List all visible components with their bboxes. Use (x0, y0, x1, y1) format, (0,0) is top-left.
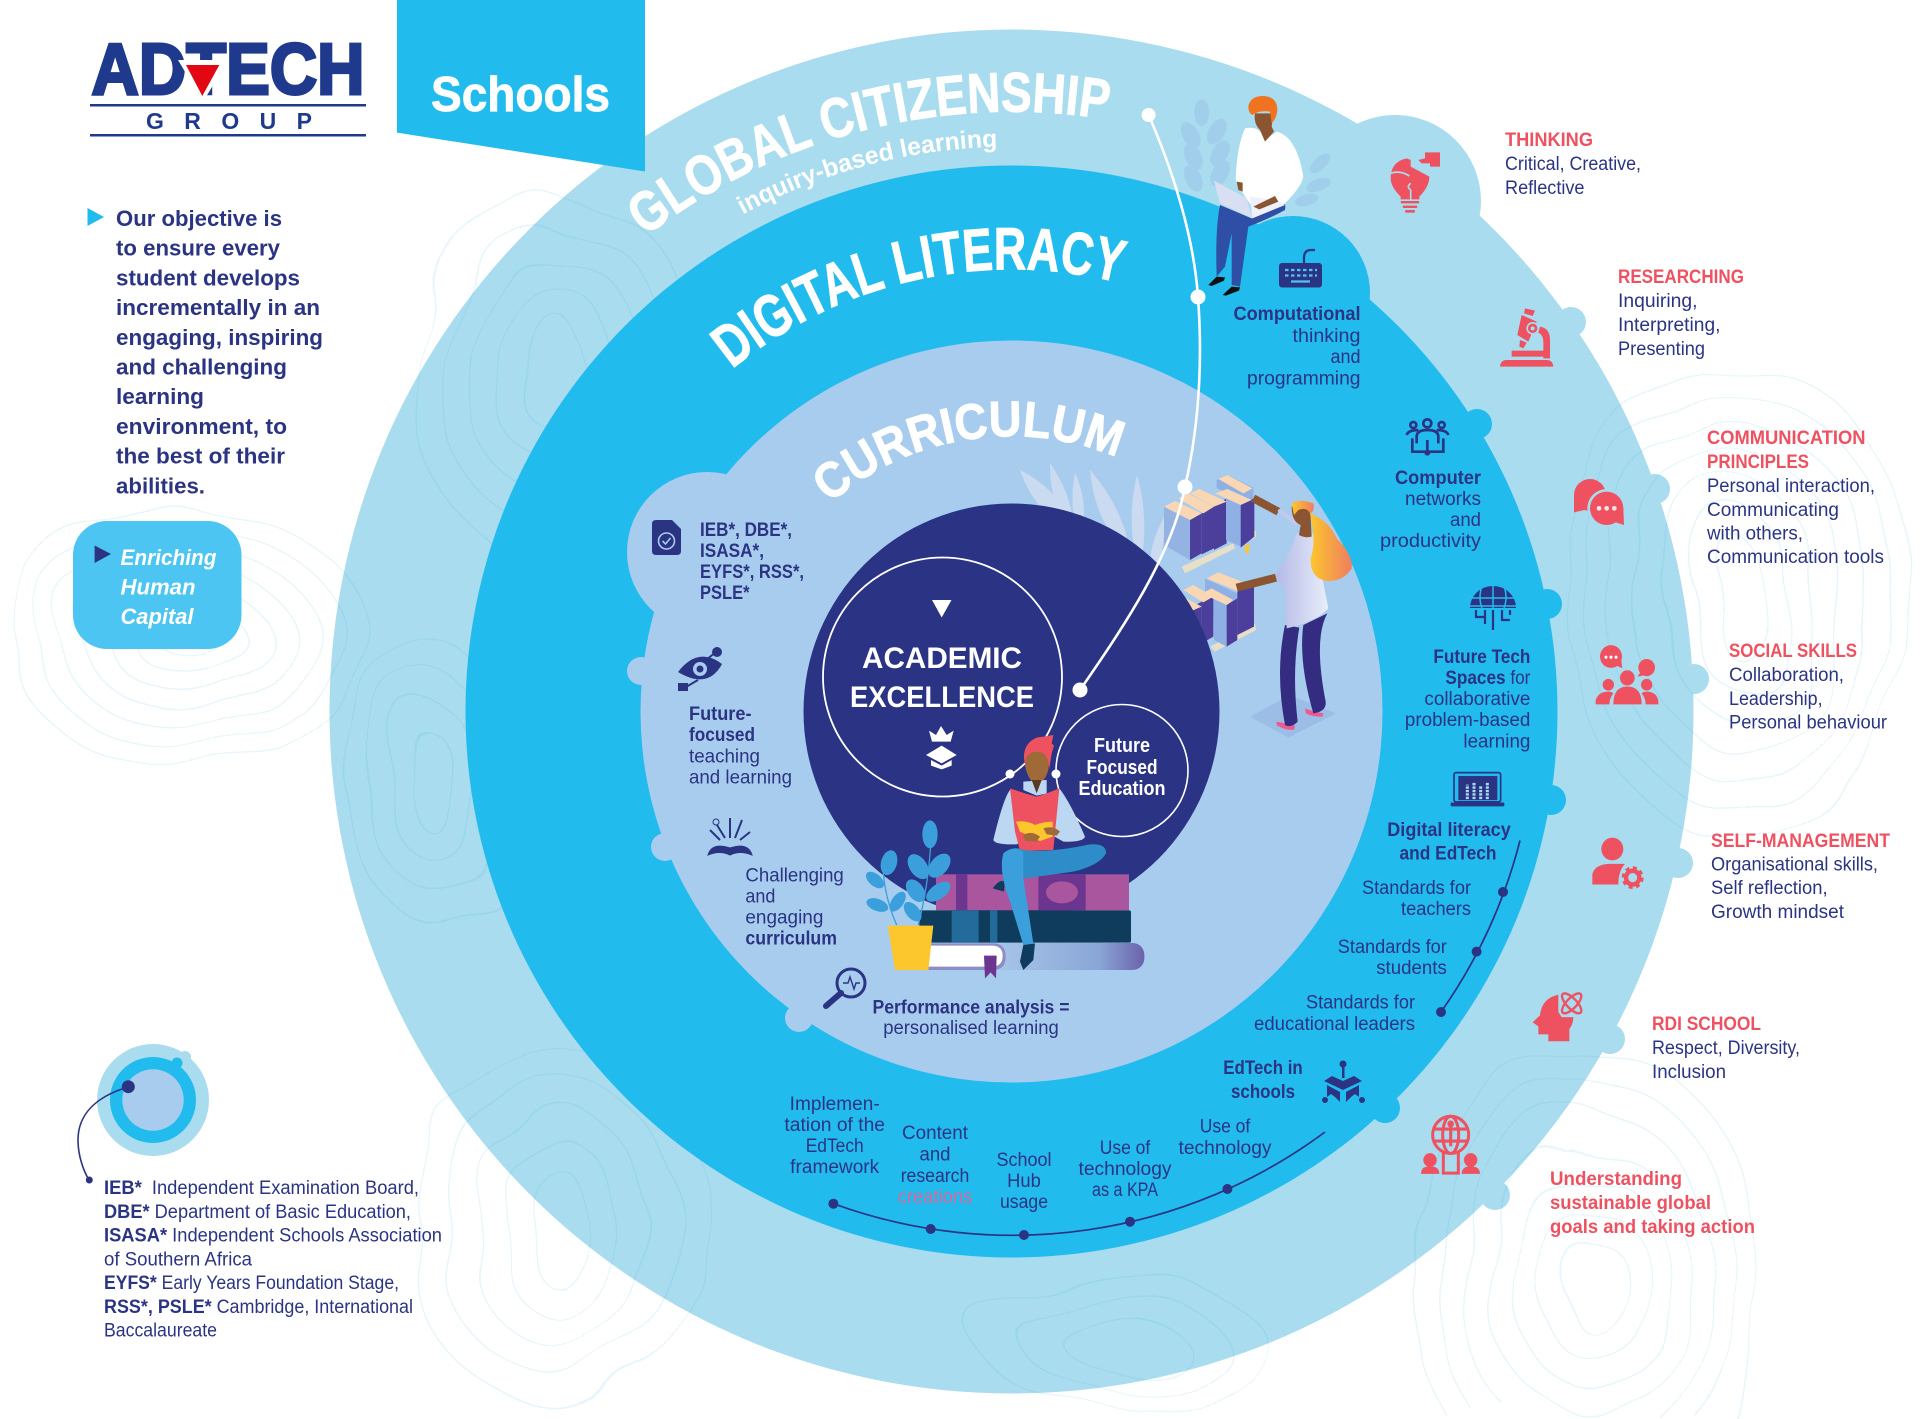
illustration: woman reaching for books (1237, 498, 1352, 738)
block: communication principles: with others, (1706, 524, 1803, 544)
objective statement: environment, to (116, 414, 287, 439)
curved subtitle: inquiry-based learning: inquiry-based learning (736, 130, 996, 214)
illustration: man with laptop (1177, 96, 1333, 296)
block: computational thinking with keyboard icon: programming (1247, 368, 1360, 390)
objective statement: to ensure every (116, 236, 280, 261)
block: computational thinking with keyboard icon: thinking (1292, 326, 1360, 347)
flag: Schools: Schools (431, 68, 610, 122)
block: challenging curriculum with book icon (708, 818, 844, 950)
block: researching (1618, 267, 1744, 360)
legend: abbreviations: IEB* Independent Examination Board, (104, 1178, 419, 1199)
label: implementation of the framework: Implemen- (790, 1094, 880, 1115)
block: researching: Interpreting, (1618, 315, 1720, 336)
block: EdTech in schools (1223, 1058, 1365, 1103)
arms (1237, 498, 1278, 588)
label: school hub usage: usage (1000, 1192, 1048, 1213)
block: communication principles: Communication tools (1707, 547, 1884, 568)
curved title: digital literacy: DIGITAL LITERACY (708, 228, 1129, 368)
block: social skills: SOCIAL SKILLS (1729, 641, 1857, 662)
body (1275, 533, 1328, 628)
label: implementation of the framework: framework (790, 1157, 880, 1178)
label: use of technology (1178, 1117, 1272, 1159)
books: lower row (1170, 572, 1254, 650)
objective statement: learning (116, 384, 204, 409)
objective statement: and challenging (116, 354, 287, 380)
panel: outer ring global citizenship (330, 30, 1709, 1394)
block: performance analysis with magnifier icon (826, 969, 1070, 1039)
block: self-management (1711, 831, 1890, 923)
icon: triangle (932, 600, 952, 618)
block: self-management: Growth mindset (1711, 902, 1845, 923)
block: future-focused teaching with eye icon (678, 647, 792, 789)
block: researching: RESEARCHING (1618, 267, 1744, 288)
illustration: pale leaves behind centre circle (1020, 463, 1165, 590)
block: communication principles: COMMUNICATION (1707, 428, 1866, 449)
legs (1280, 613, 1327, 726)
icon: group of people with speech bubbles (1596, 645, 1658, 704)
block: curriculum bodies with document icon: IEB*, DBE*, (700, 520, 792, 541)
block: sustainable goals: sustainable global (1550, 1193, 1711, 1214)
books (919, 874, 1144, 978)
legend: abbreviations: of Southern Africa (104, 1250, 252, 1271)
timeline: standards (1436, 840, 1520, 1017)
hair (1248, 96, 1277, 123)
hair (1292, 501, 1314, 515)
label: use of technology as a KPA (1078, 1138, 1172, 1201)
callout: enriching human capital: Enriching (120, 545, 217, 570)
block: digital literacy and EdTech standards: students (1376, 958, 1447, 979)
block: EdTech in schools: schools (1231, 1082, 1295, 1103)
block: EdTech in schools: EdTech in (1223, 1058, 1303, 1079)
shirt (1236, 128, 1303, 208)
icon: document (652, 520, 681, 555)
block: curriculum bodies with document icon: PSLE* (700, 583, 750, 604)
icon: eye (678, 647, 722, 691)
block: curriculum bodies with document icon (652, 520, 804, 604)
objective statement: abilities. (116, 473, 205, 498)
icon: microscope (1500, 308, 1553, 367)
panel: inner circle curriculum (627, 340, 1382, 1082)
block: computer networks with people icon: networks (1405, 489, 1481, 510)
block: curriculum bodies with document icon: ISASA*, (700, 541, 764, 562)
label: school hub usage (996, 1150, 1052, 1213)
label: use of technology: technology (1178, 1138, 1272, 1159)
label: use of technology as a KPA: technology (1078, 1159, 1172, 1180)
label: use of technology: Use of (1200, 1117, 1251, 1138)
objective statement: Our objective is (116, 206, 282, 231)
block: computer networks with people icon: Computer (1395, 468, 1482, 489)
icon: circuit globe (1470, 586, 1516, 630)
plant (863, 820, 955, 925)
block: performance analysis with magnifier icon: personalised learning (883, 1018, 1059, 1039)
block: communication principles: Communicating (1707, 500, 1839, 521)
block: sustainable goals: Understanding (1550, 1169, 1682, 1190)
block: digital literacy and EdTech standards: Standards for (1362, 878, 1472, 899)
block: social skills: Leadership, (1729, 689, 1823, 710)
block: digital literacy and EdTech standards: Standards for (1338, 937, 1447, 958)
flag: Schools (397, 0, 645, 172)
legend: abbreviations: ISASA* Independent Schools Association (104, 1226, 442, 1247)
block: future tech spaces with globe icon: Spaces for (1445, 668, 1531, 689)
label: use of technology as a KPA: Use of (1100, 1138, 1151, 1159)
objective statement (88, 206, 323, 498)
block: curriculum bodies with document icon: EYFS*, RSS*, (700, 562, 804, 583)
block: communication principles: Personal interaction, (1707, 476, 1875, 497)
block: digital literacy and EdTech standards: teachers (1401, 899, 1471, 920)
callout: enriching human capital: Capital (120, 604, 194, 629)
label: school hub usage: School (996, 1150, 1052, 1171)
icon: red triangle (178, 60, 228, 102)
block: RDI school: Inclusion (1652, 1062, 1726, 1083)
future focused education circle: Focused (1086, 757, 1158, 779)
legend: abbreviations: Baccalaureate (104, 1321, 217, 1342)
shelf: upper (1182, 531, 1256, 652)
timeline: EdTech in schools (828, 1132, 1325, 1240)
logo: ADTECH GROUP (90, 30, 366, 136)
academic excellence circle: EXCELLENCE (850, 681, 1034, 714)
block: future-focused teaching with eye icon: focused (689, 725, 755, 746)
icon: person with gear (1592, 838, 1642, 888)
block: future tech spaces with globe icon (1405, 586, 1531, 752)
block: digital literacy and EdTech standards (1254, 773, 1520, 1035)
block: computer networks with people icon: productivity (1380, 531, 1482, 552)
label: school hub usage: Hub (1007, 1171, 1041, 1192)
legs (1216, 203, 1285, 287)
block: future-focused teaching with eye icon: teaching (689, 746, 760, 767)
label: content and research creations (898, 1123, 972, 1208)
block: challenging curriculum with book icon: curriculum (745, 928, 837, 950)
future focused education circle: Education (1078, 778, 1166, 800)
block: social skills: Collaboration, (1729, 665, 1844, 686)
academic excellence circle (823, 558, 1062, 796)
block: computational thinking with keyboard icon: Computational (1234, 304, 1360, 325)
future focused education circle (1056, 704, 1188, 836)
icon: bullet arrow (88, 208, 104, 226)
block: challenging curriculum with book icon: engaging (745, 908, 823, 929)
block: researching: Inquiring, (1618, 291, 1698, 312)
label: content and research creations: and (920, 1145, 950, 1166)
logo: ADTECH GROUP: GROUP (146, 108, 312, 134)
block: communication principles (1706, 428, 1884, 568)
block: thinking: Reflective (1505, 178, 1584, 199)
block: performance analysis with magnifier icon: Performance analysis = (872, 998, 1070, 1018)
block: challenging curriculum with book icon: Challenging (745, 866, 844, 887)
academic excellence circle: ACADEMIC (862, 642, 1022, 675)
block: thinking (1505, 130, 1641, 199)
block: future tech spaces with globe icon: collaborative (1424, 689, 1530, 710)
icon: crown and graduation cap (926, 726, 957, 769)
feet (1277, 708, 1323, 730)
objective statement: engaging, inspiring (116, 325, 323, 350)
block: challenging curriculum with book icon: and (745, 886, 775, 907)
legend: abbreviations: DBE* Department of Basic Education, (104, 1202, 411, 1223)
block: thinking: THINKING (1505, 130, 1593, 151)
block: computer networks with people icon (1380, 419, 1482, 552)
label: content and research creations: creations (898, 1187, 972, 1208)
legend: mini concentric circles (78, 1044, 209, 1184)
head (1255, 113, 1274, 142)
logo: ADTECH GROUP: ADTECH (92, 30, 364, 110)
curved title: curriculum: CURRICULUM (815, 401, 1126, 497)
icon: globe and people (1421, 1116, 1480, 1174)
label: content and research creations: research (901, 1166, 969, 1187)
laptop (1250, 197, 1285, 218)
block: self-management: Self reflection, (1711, 878, 1828, 899)
icon: magnifier (826, 969, 865, 1006)
future focused education circle: Future (1094, 735, 1150, 757)
block: future tech spaces with globe icon: Future Tech (1433, 647, 1530, 668)
block: digital literacy and EdTech standards: educational leaders (1254, 1014, 1415, 1035)
callout: enriching human capital: Human (120, 574, 196, 600)
block: future-focused teaching with eye icon: Future- (689, 704, 752, 725)
illustration: stacked books and plant with reader (863, 735, 1144, 978)
label: content and research creations: Content (902, 1123, 969, 1144)
icon: chat bubbles (1574, 479, 1626, 528)
block: digital literacy and EdTech standards: Digital literacy (1387, 820, 1511, 841)
block: social skills: Personal behaviour (1729, 713, 1888, 734)
block: thinking: Critical, Creative, (1505, 154, 1641, 175)
objective statement: the best of their (116, 444, 285, 469)
block: sustainable goals: goals and taking action (1550, 1217, 1755, 1238)
callout: enriching human capital (73, 521, 242, 649)
label: implementation of the framework: EdTech (806, 1136, 864, 1157)
block: digital literacy and EdTech standards: and EdTech (1400, 844, 1496, 864)
block: researching: Presenting (1618, 339, 1705, 360)
block: self-management: SELF-MANAGEMENT (1711, 831, 1890, 852)
block: RDI school (1652, 1014, 1800, 1083)
block: communication principles: PRINCIPLES (1707, 452, 1809, 473)
icon: puzzle light bulb (1391, 152, 1440, 213)
label: implementation of the framework (784, 1094, 885, 1178)
label: use of technology as a KPA: as a KPA (1092, 1180, 1158, 1201)
icon: network of people (1407, 419, 1448, 454)
block: digital literacy and EdTech standards: Standards for (1306, 992, 1416, 1014)
label: implementation of the framework: tation of the (784, 1115, 885, 1136)
block: self-management: Organisational skills, (1711, 854, 1878, 876)
hands (1237, 182, 1278, 209)
shoes (1208, 277, 1240, 296)
objective statement: incrementally in an (116, 295, 320, 320)
icon: open book with sparks (708, 818, 752, 855)
floor tile (1250, 695, 1336, 738)
legend: abbreviations: EYFS* Early Years Foundation Stage, (104, 1273, 399, 1294)
objective statement: student develops (116, 265, 300, 290)
head (1292, 507, 1312, 537)
icon: cube with circuits (1322, 1060, 1365, 1103)
centre circle: dark navy (804, 504, 1220, 920)
block: computer networks with people icon: and (1450, 510, 1481, 531)
connector line with dots (1006, 108, 1206, 778)
illustration: bookshelves with books (1164, 475, 1256, 652)
icon: keyboard (1279, 250, 1322, 288)
block: RDI school: RDI SCHOOL (1652, 1014, 1761, 1035)
icon: laptop chart (1451, 773, 1504, 806)
block: social skills (1729, 641, 1888, 734)
panel: middle ring digital literacy (466, 166, 1566, 1258)
legend: abbreviations (104, 1178, 442, 1342)
block: future tech spaces with globe icon: learning (1463, 732, 1530, 752)
pot (888, 926, 933, 970)
block: future-focused teaching with eye icon: and learning (689, 768, 792, 789)
wheat leaves (1177, 99, 1333, 209)
curved title: global citizenship: GLOBAL CITIZENSHIP (630, 72, 1110, 230)
block: computational thinking with keyboard icon: and (1330, 347, 1360, 368)
legend: abbreviations: RSS*, PSLE* Cambridge, International (104, 1297, 413, 1318)
block: computational thinking with keyboard icon (1234, 250, 1360, 390)
block: future tech spaces with globe icon: problem-based (1405, 710, 1530, 731)
block: sustainable goals (1550, 1169, 1755, 1238)
reader (993, 735, 1106, 970)
block: RDI school: Respect, Diversity, (1652, 1038, 1800, 1059)
icon: head with atom (1533, 990, 1584, 1041)
books: upper row (1164, 475, 1254, 560)
